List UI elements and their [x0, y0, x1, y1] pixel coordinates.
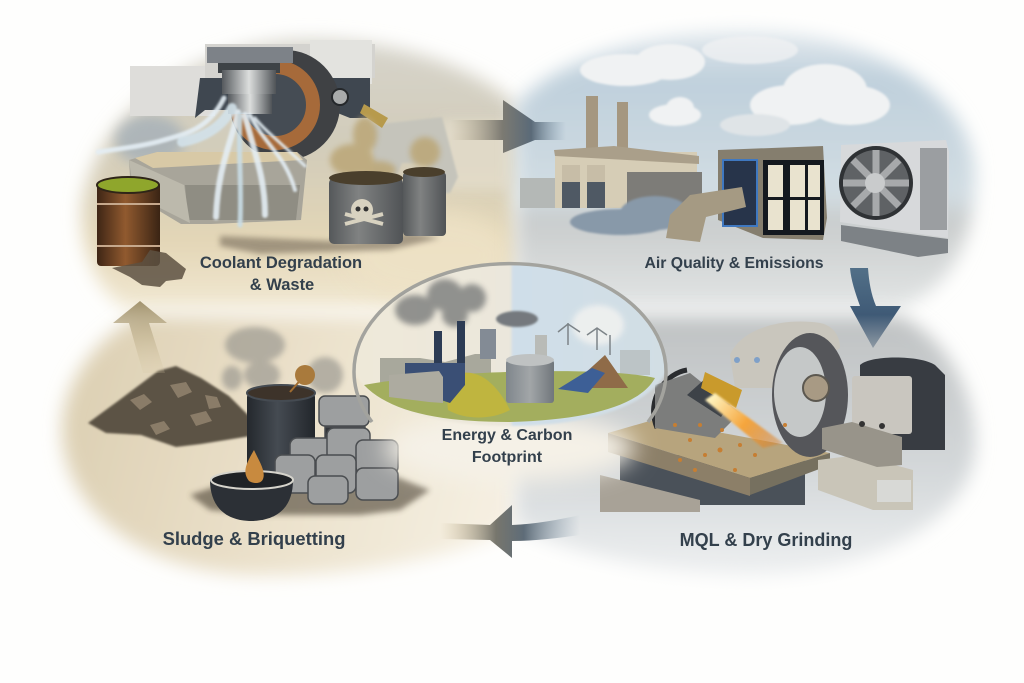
- icon: grinding table: [600, 420, 913, 512]
- icon: smoke: [395, 279, 486, 327]
- icon: sludge pile: [88, 366, 257, 447]
- heading: air quality: Air Quality & Emissions: [644, 255, 824, 272]
- icon: MQL tool: [654, 370, 742, 438]
- icon: coolant barrel: [97, 177, 160, 266]
- icon: grinding wheel and guard: [730, 322, 848, 457]
- icon: landscape: [364, 321, 655, 422]
- heading: energy and carbon: Energy & Carbon: [442, 427, 572, 444]
- heading: sludge: Sludge & Briquetting: [163, 528, 345, 549]
- icon: coolant tank: [129, 152, 307, 224]
- icon: exhaust smoke: [570, 196, 690, 235]
- icon: metal chips: [112, 250, 186, 287]
- icon: oil stain: [190, 470, 430, 515]
- panel: energy and carbon footprint: [354, 264, 666, 482]
- heading: footprint: Footprint: [472, 449, 543, 466]
- icon: coolant spray: [98, 98, 305, 225]
- icon: grinding machine: [130, 40, 388, 160]
- icon: air filter unit: [666, 146, 827, 242]
- frame: ellipse arc: [354, 264, 666, 422]
- icon: briquettes: [275, 396, 398, 504]
- arrow: right: [850, 268, 901, 348]
- icon: cloud: [496, 311, 538, 327]
- icon: fan unit: [839, 140, 949, 257]
- icon: bowl with flame: [210, 450, 293, 521]
- panel: sludge and briquetting: [62, 316, 516, 575]
- icon: steam: [330, 117, 440, 179]
- icon: clouds: [580, 36, 890, 136]
- panel: air quality and emissions: [516, 32, 975, 308]
- panel: MQL and dry grinding: [516, 316, 975, 575]
- icon: factory: [520, 96, 702, 208]
- icon: background plant building: [372, 117, 458, 193]
- icon: white cloud: [572, 305, 624, 345]
- icon: toxic drums: [220, 167, 446, 254]
- heading: waste: & Waste: [250, 276, 314, 294]
- icon: sparks: [673, 393, 787, 472]
- arrow: bottom: [440, 505, 580, 558]
- icon: dark drum: [247, 365, 315, 482]
- panel: coolant degradation and waste: [82, 40, 516, 308]
- arrow: top: [450, 100, 566, 153]
- heading: coolant degradation: Coolant Degradation: [200, 254, 362, 272]
- heading: MQL: MQL & Dry Grinding: [680, 530, 852, 550]
- icon: control cabinet: [822, 358, 945, 467]
- icon: smoke plumes: [222, 327, 343, 393]
- arrow: left: [113, 301, 167, 373]
